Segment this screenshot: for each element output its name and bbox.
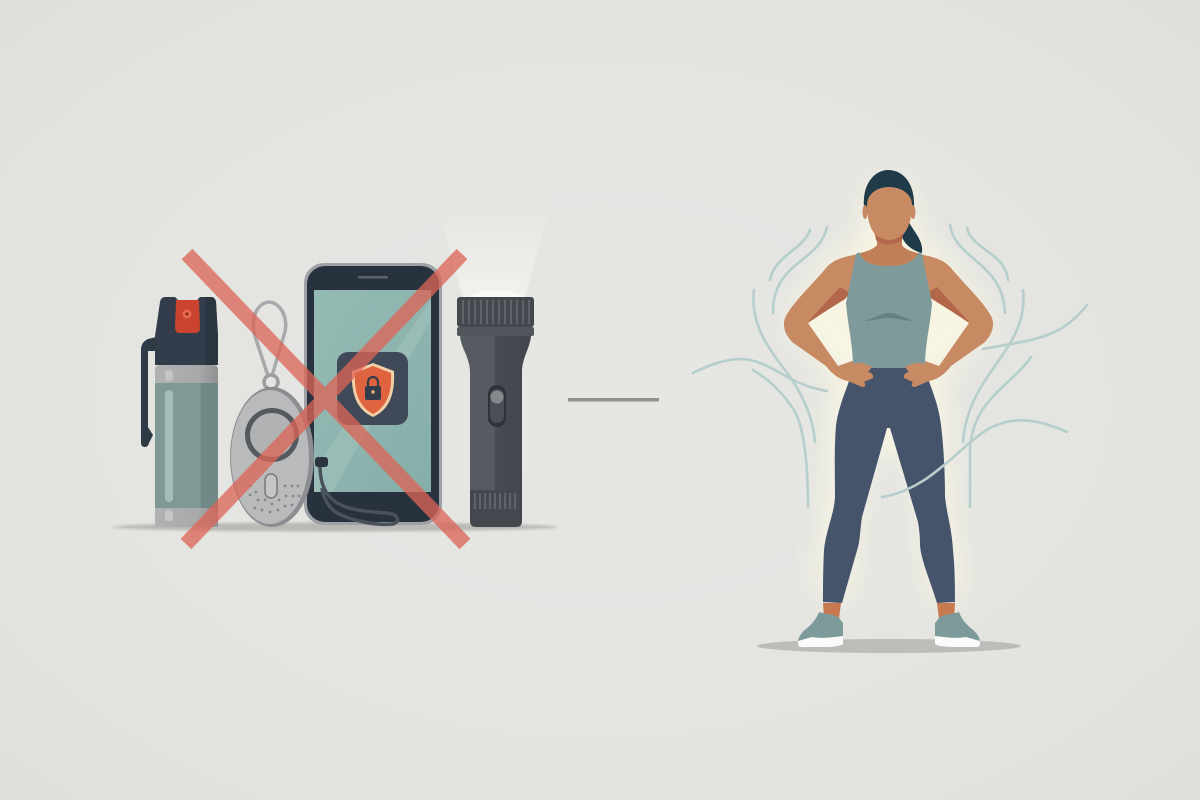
figure: neck and shoulders: [857, 225, 921, 276]
figure: right arm shadow: [927, 287, 970, 323]
figure: hands over waist: [843, 363, 934, 387]
panel: discarded safety gadgets: [112, 197, 558, 544]
figure: ponytail: [901, 220, 922, 253]
icon: pepper spray: [141, 297, 218, 527]
figure: right shoe: [935, 612, 980, 647]
icon: flashlight: [457, 290, 534, 527]
figure: left shoe: [798, 612, 843, 647]
figure: left arm: [784, 254, 873, 387]
figure: hair: [864, 170, 914, 213]
figure: chin shadow: [875, 234, 903, 244]
wrist strap: [320, 465, 398, 524]
icon: personal alarm keychain: [230, 302, 314, 527]
ground shadow under figure: [757, 639, 1021, 653]
red crossing-out X: [186, 254, 465, 544]
figure: tank top: [846, 252, 932, 368]
figure: ankles: [823, 603, 955, 619]
figure: face: [867, 187, 912, 241]
energy wisps behind figure: [693, 225, 1087, 507]
figure: right arm: [904, 254, 993, 387]
panel: confident woman: [693, 170, 1087, 653]
arrow: plain divider dash between the two scenes: [568, 398, 659, 402]
icon: smartphone with shield app: [304, 263, 442, 525]
phone screen: [314, 290, 431, 492]
shield with padlock: [352, 363, 394, 417]
figure: leggings: [823, 368, 955, 603]
app icon tile: [337, 352, 408, 425]
warm glow around figure: [783, 175, 995, 600]
ground shadow under gadgets: [112, 522, 558, 532]
figure: left arm shadow: [807, 287, 850, 323]
figure: ears: [862, 205, 916, 219]
figure: tank top fold: [865, 313, 913, 321]
flashlight beam: [435, 197, 553, 297]
wisp crossing in front of leg: [882, 420, 1067, 497]
